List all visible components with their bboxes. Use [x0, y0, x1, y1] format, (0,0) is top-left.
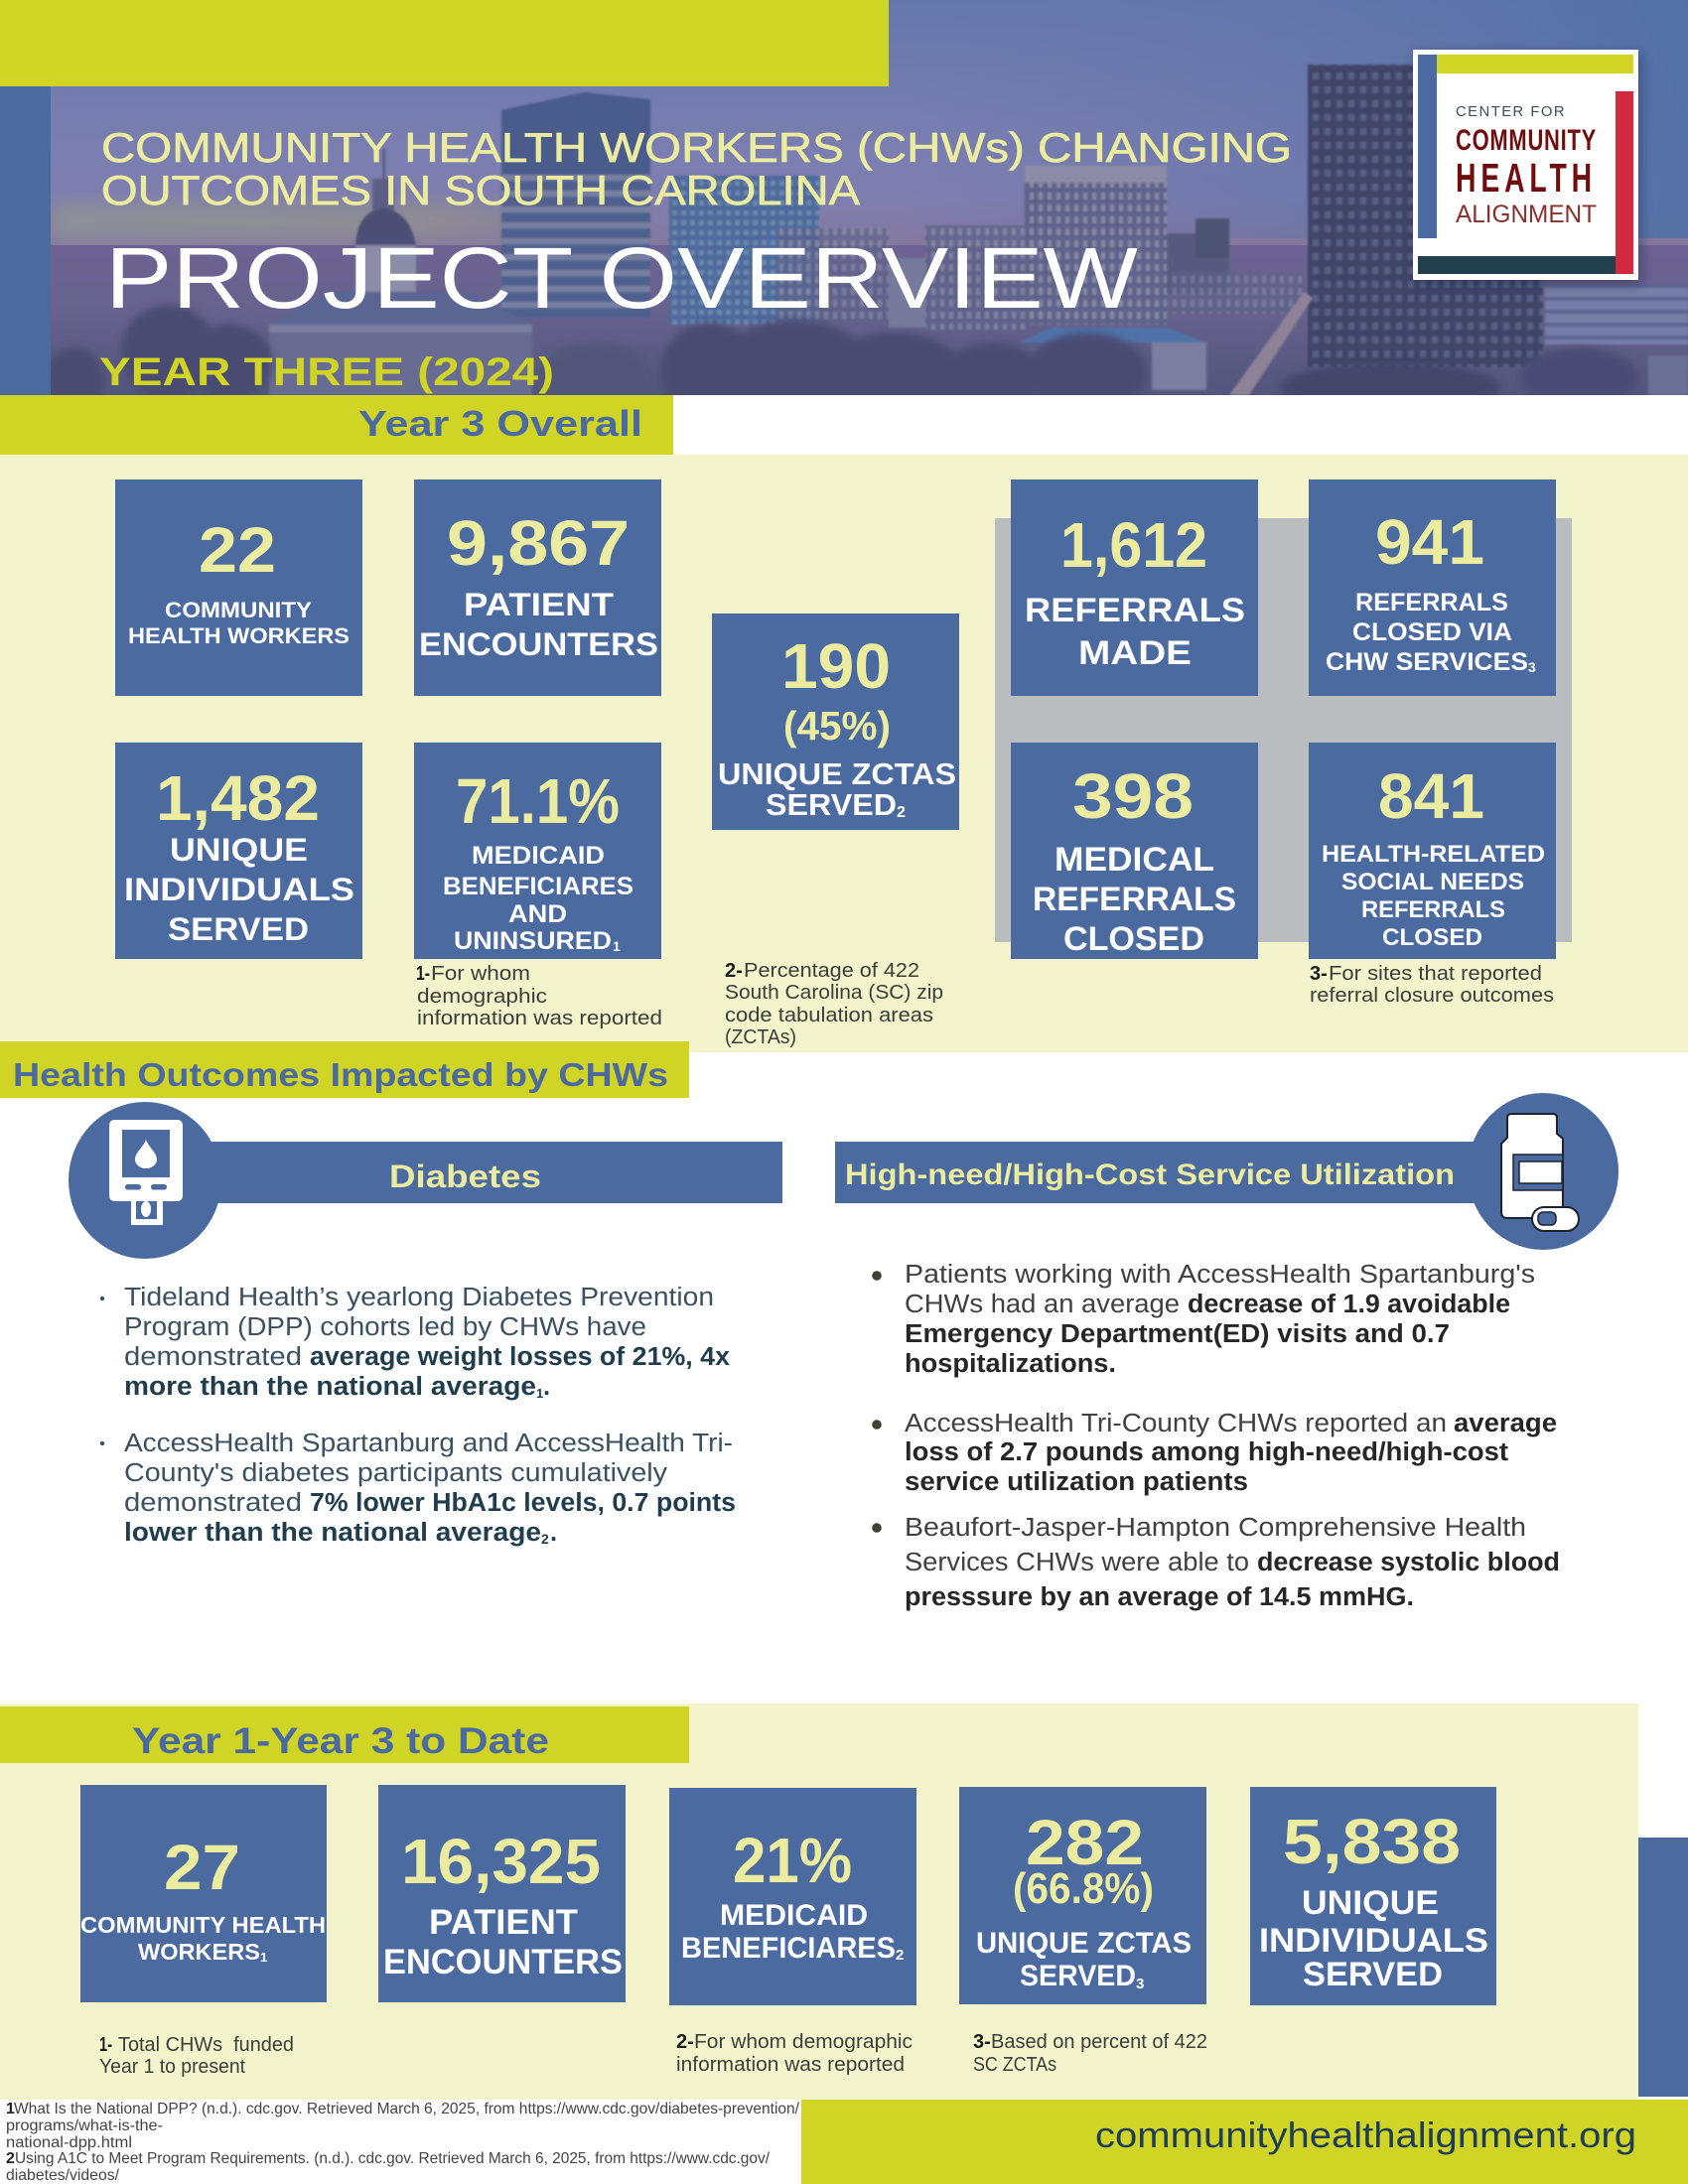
footnote 1: For whom [431, 963, 530, 985]
card: 398 medical referrals closed: 398 [1072, 760, 1194, 832]
card: 27 community health workers [80, 1785, 327, 2002]
card: 841 health-related social needs referrals closed [1309, 743, 1556, 959]
card: 1,482 unique individuals served: 1,482 [156, 762, 320, 834]
card: 282 (66.8%) unique ZCTAs served: UNIQUE ZCTAS [976, 1927, 1192, 1960]
card: 71.1% medicaid beneficiaries and uninsured [414, 743, 661, 959]
footnote 3 [1310, 963, 1554, 1007]
footnote: percent of ZCTAs: 3- [973, 2031, 991, 2053]
card: 190 unique ZCTAs served: (45%) [783, 703, 891, 749]
heading: Health Outcomes Impacted by CHWs [0, 1041, 689, 1098]
card: 941 referrals closed via CHW services: CHW SERVICES [1326, 648, 1528, 676]
logo: Center for Community Health Alignment: HEALTH [1456, 155, 1597, 201]
footnote 3: referral closure outcomes [1310, 985, 1554, 1007]
references: national-dpp.html [6, 2134, 132, 2151]
hero title [101, 124, 1292, 213]
panel header: Diabetes: Diabetes [389, 1159, 541, 1194]
card: 71.1% medicaid beneficiaries and uninsured: MEDICAID [472, 842, 605, 870]
text block: service utilization findings: presssure by an average of 14.5 mmHG. [905, 1583, 1414, 1611]
panel header: Diabetes [145, 1142, 782, 1203]
card: 21% medicaid beneficiaries: BENEFICIARES [681, 1932, 896, 1965]
year three label: YEAR THREE (2024) [99, 350, 554, 394]
heading: Year 1-Year 3 to Date: Year 1-Year 3 to Date [132, 1720, 549, 1761]
hero title: COMMUNITY HEALTH WORKERS (CHWs) CHANGING [101, 124, 1292, 171]
card: 941 referrals closed via CHW services: CLOSED VIA [1352, 618, 1512, 646]
card: 21% medicaid beneficiaries: 21% [733, 1825, 852, 1896]
logo: Center for Community Health Alignment: CENTER FOR [1456, 103, 1566, 120]
text block: diabetes findings: 2 [541, 1531, 549, 1547]
card: 190 unique ZCTAs served: 190 [781, 630, 891, 702]
references: diabetes/videos/ [6, 2167, 120, 2184]
text block: diabetes findings: demonstrated [124, 1489, 302, 1517]
footnote: percent of ZCTAs: Based on percent of 422 [991, 2031, 1207, 2053]
footnote: total CHWs funded [99, 2034, 294, 2078]
text block: diabetes findings: County's diabetes participants cumulatively [124, 1459, 667, 1487]
card: 1,482 unique individuals served [115, 743, 362, 959]
card: 5,838 unique individuals served: INDIVIDUALS [1259, 1922, 1488, 1960]
card: 841 health-related social needs referrals closed: CLOSED [1382, 924, 1482, 951]
card: 9,867 patient encounters [414, 479, 661, 696]
card: 5,838 unique individuals served [1250, 1787, 1496, 2005]
card: 21% medicaid beneficiaries: MEDICAID [720, 1899, 868, 1932]
card: 22 community health workers: COMMUNITY [165, 598, 312, 622]
card: 282 (66.8%) unique ZCTAs served: 282 [1026, 1807, 1144, 1878]
references: 2 [6, 2150, 15, 2167]
card: 27 community health workers: 1 [260, 1950, 267, 1965]
text block: diabetes findings: more than the national average [124, 1373, 536, 1401]
card: 398 medical referrals closed [1011, 743, 1258, 959]
card: 71.1% medicaid beneficiaries and uninsured: AND [508, 900, 567, 928]
left blue bar [0, 86, 51, 395]
card: 1,482 unique individuals served: UNIQUE [170, 832, 308, 868]
footnote: demographic information: For whom demographic [694, 2031, 913, 2053]
text block: service utilization findings: average [1454, 1410, 1557, 1437]
card: 5,838 unique individuals served: SERVED [1303, 1956, 1443, 1993]
panel header: High-need/High-Cost Service Utilization [835, 1142, 1543, 1203]
card: 190 unique ZCTAs served [712, 614, 959, 830]
footnote: percent of ZCTAs: SC ZCTAs [973, 2054, 1056, 2076]
card: 27 community health workers: WORKERS [138, 1939, 260, 1965]
card: 22 community health workers [115, 479, 362, 696]
logo: Center for Community Health Alignment [1413, 50, 1638, 280]
card: 398 medical referrals closed: REFERRALS [1033, 881, 1236, 918]
panel header: High-need/High-Cost Service Utilization: High-need/High-Cost Service Utilization [845, 1159, 1455, 1191]
card: 16,325 patient encounters: 16,325 [401, 1826, 601, 1897]
card: 941 referrals closed via CHW services [1309, 479, 1556, 696]
card: 16,325 patient encounters [378, 1785, 626, 2002]
text block: diabetes findings: average weight losses of 21%, 4x [310, 1343, 730, 1371]
footnote 2: (ZCTAs) [725, 1026, 796, 1048]
icon: pill bottle [1468, 1093, 1618, 1250]
card: 71.1% medicaid beneficiaries and uninsured: 1 [613, 938, 621, 954]
card: 22 community health workers: 22 [199, 514, 276, 586]
text block: service utilization findings: Emergency Department(ED) visits and 0.7 [905, 1320, 1450, 1348]
hero title: OUTCOMES IN SOUTH CAROLINA [101, 167, 860, 213]
card: 190 unique ZCTAs served: SERVED [766, 787, 897, 822]
references [6, 2101, 800, 2184]
grey backing for referral cards [995, 518, 1572, 942]
card: 5,838 unique individuals served: 5,838 [1283, 1806, 1461, 1877]
references: programs/what-is-the- [6, 2117, 163, 2134]
heading: Year 1-Year 3 to Date [0, 1706, 689, 1763]
text block: service utilization findings: service utilization patients [905, 1468, 1248, 1496]
footnote 2: code tabulation areas [725, 1005, 933, 1026]
card: 16,325 patient encounters: PATIENT [429, 1903, 578, 1942]
icon: glucose meter [69, 1102, 221, 1259]
panel: Year 1-Year 3 to date background [0, 1704, 1638, 2100]
heading: Year 3 Overall: Year 3 Overall [358, 403, 642, 444]
footnote 2 [725, 960, 943, 1048]
text block: diabetes findings: 1 [536, 1386, 543, 1401]
heading: Health Outcomes Impacted by CHWs: Health Outcomes Impacted by CHWs [13, 1056, 668, 1093]
card: 27 community health workers: 27 [164, 1832, 240, 1903]
text block: service utilization findings [872, 1261, 1560, 1611]
card: 1,612 referrals made: 1,612 [1060, 509, 1207, 581]
text block: diabetes findings [100, 1284, 736, 1547]
card: 21% medicaid beneficiaries: 2 [896, 1947, 904, 1964]
card: 71.1% medicaid beneficiaries and uninsured: BENEFICIARES [443, 873, 633, 900]
card: 941 referrals closed via CHW services: REFERRALS [1355, 589, 1508, 616]
card: 282 (66.8%) unique ZCTAs served [959, 1787, 1206, 2004]
card: 27 community health workers: COMMUNITY HEALTH [80, 1912, 326, 1938]
card: 841 health-related social needs referrals closed: REFERRALS [1361, 896, 1505, 923]
footnote: demographic information: 2- [676, 2031, 694, 2053]
card: 282 (66.8%) unique ZCTAs served: SERVED [1020, 1960, 1136, 1992]
text block: diabetes findings: AccessHealth Spartanburg and AccessHealth Tri- [124, 1430, 733, 1457]
project overview heading: PROJECT OVERVIEW [105, 230, 1138, 327]
card: 5,838 unique individuals served: UNIQUE [1302, 1884, 1439, 1922]
text block: service utilization findings: CHWs had an average [905, 1291, 1180, 1318]
card: 282 (66.8%) unique ZCTAs served: 3 [1136, 1976, 1144, 1992]
references: 1 [6, 2101, 15, 2117]
card: 190 unique ZCTAs served: 2 [897, 804, 906, 821]
text block: service utilization findings: AccessHealth Tri-County CHWs reported an [905, 1410, 1447, 1437]
card: 398 medical referrals closed: MEDICAL [1055, 841, 1214, 879]
footnote: total CHWs funded: Total CHWs funded [118, 2034, 294, 2056]
card: 841 health-related social needs referrals closed: 841 [1378, 760, 1484, 832]
footnote: demographic information [676, 2031, 913, 2076]
text block: service utilization findings: loss of 2.7 pounds among high-need/high-cost [905, 1438, 1509, 1466]
card: 1,612 referrals made [1011, 479, 1258, 696]
text block: diabetes findings: lower than the national average [124, 1519, 541, 1547]
card: 9,867 patient encounters: PATIENT [464, 587, 615, 622]
footnote 3: For sites that reported [1329, 963, 1542, 985]
text block: diabetes findings: . [550, 1519, 557, 1547]
footnote: total CHWs funded: 1- [99, 2034, 112, 2056]
footnote 1: demographic [417, 986, 547, 1008]
text block: diabetes findings: Program (DPP) cohorts led by CHWs have [124, 1313, 646, 1341]
references: Using A1C to Meet Program Requirements. (n.d.). cdc.gov. Retrieved March 6, 2025, from https://www.cdc.gov/ [15, 2150, 771, 2167]
card: 190 unique ZCTAs served: UNIQUE ZCTAS [718, 756, 956, 791]
text block: diabetes findings: Tideland Health’s yearlong Diabetes Prevention [124, 1284, 714, 1311]
text block: service utilization findings: hospitalizations. [905, 1350, 1116, 1378]
top lime block [0, 0, 889, 86]
card: 16,325 patient encounters: ENCOUNTERS [383, 1943, 623, 1981]
footnote: demographic information: information was reported [676, 2054, 905, 2076]
card: 71.1% medicaid beneficiaries and uninsured: 71.1% [456, 765, 620, 837]
card: 1,482 unique individuals served: SERVED [168, 911, 309, 947]
text block: diabetes findings: demonstrated [124, 1343, 302, 1371]
card: 1,612 referrals made: REFERRALS [1025, 592, 1245, 629]
footnote: percent of ZCTAs [973, 2031, 1207, 2076]
footnote 2: 2- [725, 960, 743, 982]
card: 841 health-related social needs referrals closed: SOCIAL NEEDS [1341, 869, 1524, 895]
right blue bar [1638, 1838, 1688, 2097]
footnote 1: information was reported [417, 1008, 662, 1029]
footnote: total CHWs funded: Year 1 to present [99, 2056, 245, 2078]
card: 22 community health workers: HEALTH WORKERS [128, 623, 350, 648]
footer website band: communityhealthalignment.org [1095, 2115, 1636, 2155]
card: 9,867 patient encounters: ENCOUNTERS [419, 626, 658, 662]
card: 398 medical referrals closed: CLOSED [1063, 920, 1204, 958]
footnote 1 [416, 963, 662, 1029]
footnote 3: 3- [1310, 963, 1328, 985]
panel: Year 3 overall background [0, 455, 1688, 1052]
card: 1,612 referrals made: MADE [1078, 634, 1192, 672]
card: 282 (66.8%) unique ZCTAs served: (66.8%) [1013, 1864, 1154, 1913]
logo: Center for Community Health Alignment: COMMUNITY [1456, 124, 1597, 157]
text block: diabetes findings: 7% lower HbA1c levels, 0.7 points [310, 1489, 736, 1517]
footnote 1: 1- [416, 963, 430, 985]
heading: Year 3 Overall [0, 395, 673, 455]
card: 21% medicaid beneficiaries [669, 1788, 916, 2005]
text block: service utilization findings: Beaufort-Jasper-Hampton Comprehensive Health [905, 1514, 1526, 1542]
card: 941 referrals closed via CHW services: 3 [1528, 659, 1536, 675]
footnote 2: Percentage of 422 [744, 960, 919, 982]
references: What Is the National DPP? (n.d.). cdc.gov. Retrieved March 6, 2025, from https://www.cdc.gov/diabetes-prevention/ [14, 2101, 800, 2117]
hero banner skyline photo [0, 0, 1688, 422]
footnote 2: South Carolina (SC) zip [725, 982, 943, 1004]
logo: Center for Community Health Alignment: ALIGNMENT [1456, 201, 1597, 228]
text block: diabetes findings: . [543, 1373, 550, 1401]
footer website band [801, 2100, 1688, 2184]
text block: service utilization findings: decrease systolic blood [1257, 1549, 1560, 1576]
card: 1,482 unique individuals served: INDIVIDUALS [124, 872, 354, 907]
text block: service utilization findings: Services CHWs were able to [905, 1549, 1249, 1576]
card: 9,867 patient encounters: 9,867 [447, 507, 630, 579]
card: 941 referrals closed via CHW services: 941 [1375, 506, 1484, 578]
text block: service utilization findings: Patients working with AccessHealth Spartanburg's [905, 1261, 1535, 1289]
card: 841 health-related social needs referrals closed: HEALTH-RELATED [1322, 841, 1545, 868]
text block: service utilization findings: decrease of 1.9 avoidable [1188, 1291, 1510, 1318]
card: 71.1% medicaid beneficiaries and uninsured: UNINSURED [454, 927, 612, 955]
